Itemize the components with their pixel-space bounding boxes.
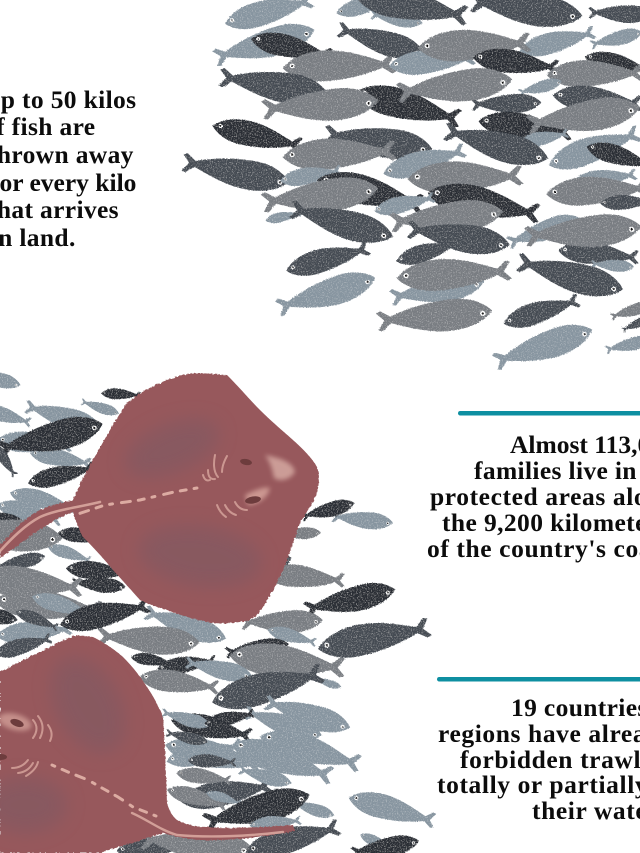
text block: families in protected areas <box>427 430 640 563</box>
text block: countries forbidding trawling <box>437 693 640 825</box>
ray body and tail <box>0 373 319 623</box>
text block: fish thrown away <box>0 85 136 252</box>
ray eyes <box>0 710 33 760</box>
fish school: lower left <box>0 364 439 853</box>
fish school: upper right <box>179 0 640 376</box>
ray shadow patches <box>117 407 266 594</box>
divider bar: countries <box>437 677 640 682</box>
ray spine and tail markings <box>0 488 197 551</box>
divider bar: families <box>458 411 640 416</box>
ray shadow patches <box>0 644 141 833</box>
ray gill marks <box>12 716 52 776</box>
ray spine and tail markings <box>52 765 283 836</box>
stingray: upper <box>0 373 319 623</box>
ray gill marks <box>203 455 247 517</box>
stingray: lower <box>0 635 295 853</box>
ray body and tail <box>0 635 295 853</box>
text block: families in protected areas: families live in <box>474 456 637 485</box>
ray eyes and snout <box>240 455 295 505</box>
